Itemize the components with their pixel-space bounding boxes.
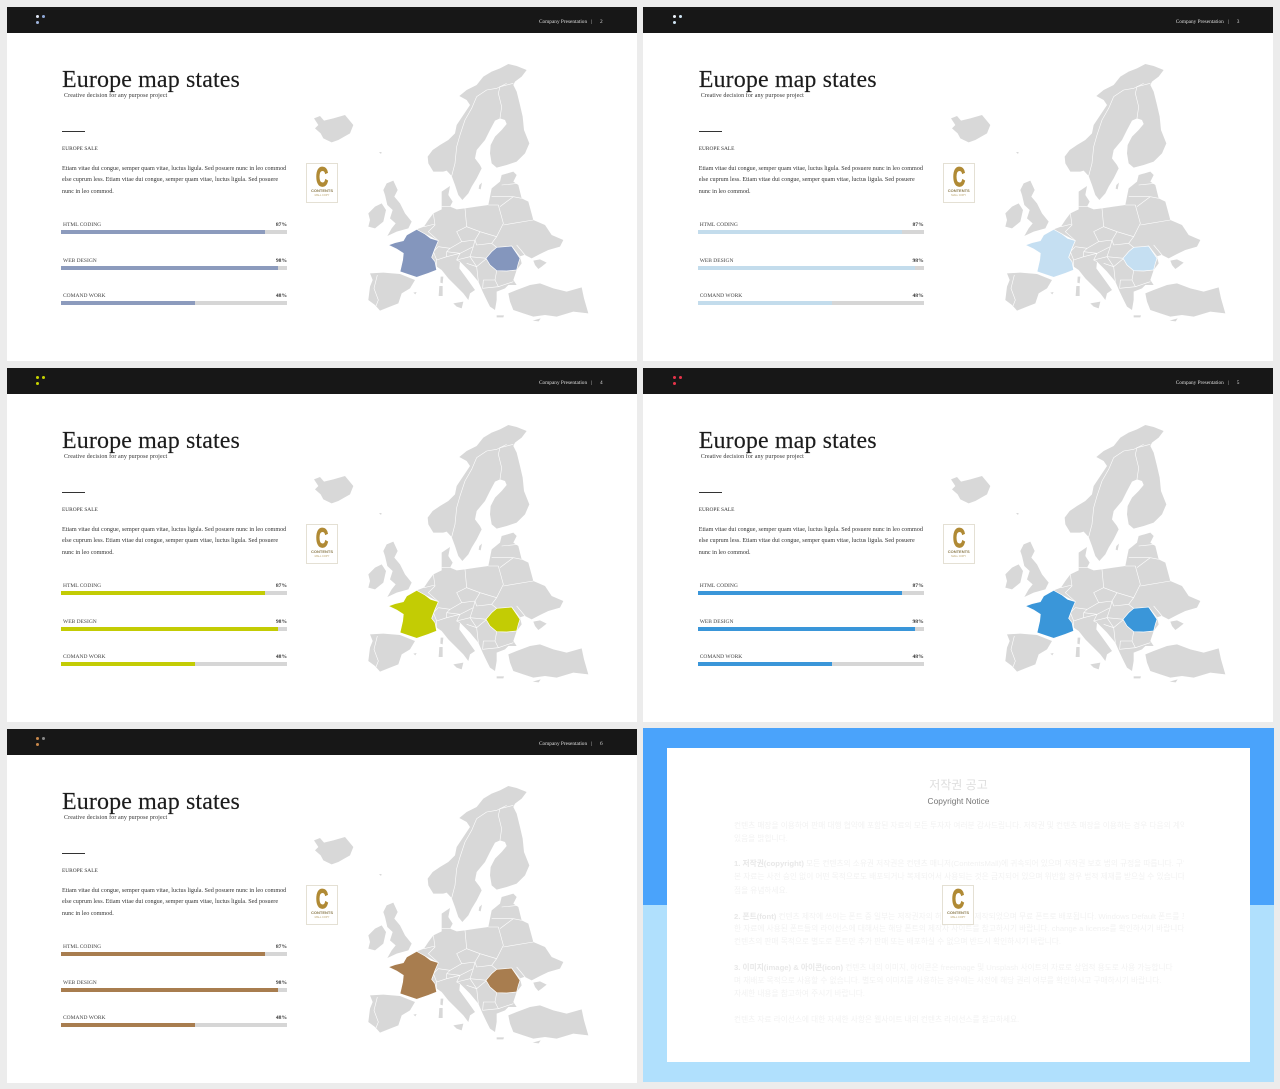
watermark logo: CONTENTS: [948, 188, 970, 193]
body text: [698, 166, 923, 195]
skill bar: comand work: COMAND WORK: [63, 1014, 106, 1020]
watermark logo: MALL COPY: [315, 555, 329, 558]
skill bar: html coding: 87%: [276, 582, 287, 588]
title: Europe map states: [62, 789, 240, 815]
skill bar: web design: 98%: [276, 618, 287, 624]
copyright text: 컨텐츠 자료 라이선스에 대한 자세한 사항은 웹사이트 내의 컨텐츠 라이선스를 참고하세요.: [734, 1015, 1019, 1024]
skill bar: comand work: [698, 654, 924, 666]
watermark logo: [306, 885, 338, 925]
skill bar: web design: WEB DESIGN: [63, 980, 97, 986]
skill bar: comand work: 48%: [276, 1014, 287, 1020]
skill bar: comand work: 48%: [276, 654, 287, 660]
europe map: [314, 425, 588, 682]
skill bar: html coding: HTML CODING: [63, 222, 101, 228]
title: Europe map states: [699, 428, 877, 454]
slide 6: copyright notice: [643, 728, 1274, 1082]
skill bar: comand work: 48%: [912, 654, 924, 660]
header bar: |: [591, 740, 592, 746]
skill bar: web design: [698, 258, 924, 270]
copyright panel: [667, 748, 1250, 1062]
skill bar: html coding: HTML CODING: [63, 582, 101, 588]
title: Europe map states: [699, 67, 877, 93]
watermark logo: CONTENTS: [311, 188, 333, 193]
skill bar: web design: 98%: [912, 618, 924, 624]
skill bar: web design: [61, 618, 287, 631]
watermark logo: MALL COPY: [951, 916, 965, 919]
skill bar: html coding: HTML CODING: [700, 582, 738, 588]
header bar: 4: [600, 380, 603, 386]
header bar: |: [591, 380, 592, 386]
body text: nunc in leo commod.: [62, 189, 114, 195]
body text: Etiam vitae dui congue, semper quam vitae, luctus ligula. Sed posuere nunc in leo commod: [62, 526, 286, 532]
body text: [62, 166, 286, 195]
watermark logo: C: [316, 523, 328, 553]
watermark logo: MALL COPY: [315, 194, 329, 197]
watermark logo: [306, 163, 338, 203]
watermark logo: CONTENTS: [947, 910, 969, 915]
skill bar: web design: 98%: [276, 258, 287, 264]
body text: nunc in leo commod.: [62, 911, 114, 917]
europe map: [314, 64, 588, 322]
slide 2: pale-blue map: [643, 7, 1273, 361]
body text: else cuprum less. Etiam vitae dui congue, semper quam vitae, luctus ligula. Sed posuere: [62, 177, 278, 183]
watermark logo: MALL COPY: [951, 194, 966, 197]
skill bar: web design: 98%: [912, 258, 924, 264]
body text: else cuprum less. Etiam vitae dui congue, semper quam vitae, luctus ligula. Sed posuere: [699, 177, 915, 183]
header bar: [7, 368, 637, 394]
skill bar: html coding: HTML CODING: [63, 944, 101, 950]
skill bar: web design: [61, 980, 287, 992]
header bar: |: [591, 18, 592, 24]
copyright title: 저작권 공고: [929, 778, 988, 792]
body text: [698, 526, 923, 556]
header bar: |: [1228, 18, 1229, 24]
body text: Etiam vitae dui congue, semper quam vitae, luctus ligula. Sed posuere nunc in leo commod: [699, 166, 923, 172]
copyright text: 자세한 내용을 참고하여 주시기 바랍니다.: [734, 989, 865, 998]
watermark logo: [942, 885, 974, 925]
header bar: Company Presentation: [1176, 380, 1224, 386]
copyright text: 2. 폰트(font) 컨텐츠 제작에 쓰이는 폰트 중 일부는 저작권자의 허가를 받아 제작되었으며 무료 폰트로 배포됩니다. Windows Default 폰트를 포함: [734, 912, 1184, 921]
slide 3: lime map: [7, 368, 637, 722]
skill bar: html coding: [698, 222, 924, 234]
body text: [62, 526, 286, 556]
copyright subtitle: Copyright Notice: [928, 796, 989, 806]
watermark logo: CONTENTS: [311, 910, 333, 915]
header bar: Company Presentation: [1176, 18, 1224, 24]
skill bar: html coding: HTML CODING: [700, 222, 738, 228]
copyright text: 점을 유념하세요.: [734, 886, 788, 895]
copyright text: 본 자료는 사전 승인 없이 어떤 목적으로도 배포되거나 복제되어서 사용되는 것은 금지되어 있으며 위반할 경우 법적 제재를 받으실 수 있습니다.: [734, 872, 1184, 881]
watermark logo: [306, 524, 338, 564]
copyright text: 며 재배포 목적으로 사용할 수 없습니다. 별도의 이미지를 사용하는 경우에는 사전에 해당 권리 여부를 확인하시고 구매하시기 바랍니다.: [734, 976, 1161, 985]
skill bar: comand work: COMAND WORK: [700, 654, 742, 660]
subtitle: Creative decision for any purpose project: [64, 454, 167, 460]
subtitle: Creative decision for any purpose project: [701, 454, 804, 460]
copyright text: 컨텐츠의 판매 목적으로 별도로 폰트만 추가 판매 또는 배포하실 수 없으며 반드시 확인하시기 바랍니다.: [734, 937, 1061, 946]
skill bar: comand work: 48%: [276, 292, 287, 298]
body text: else cuprum less. Etiam vitae dui congue, semper quam vitae, luctus ligula. Sed posuere: [62, 538, 278, 544]
skill bar: html coding: 87%: [276, 222, 287, 228]
skill bar: comand work: COMAND WORK: [63, 654, 106, 660]
section heading: EUROPE SALE: [62, 868, 98, 874]
header bar: |: [1228, 380, 1229, 386]
copyright text: 있음을 밝힙니다.: [734, 834, 788, 843]
watermark logo: C: [316, 884, 328, 914]
skill bar: html coding: [61, 222, 287, 234]
skill bar: comand work: [61, 1014, 287, 1027]
body text: [62, 888, 286, 917]
slide 4: blue map: [643, 368, 1273, 722]
skill bar: web design: [61, 258, 287, 270]
skill bar: web design: WEB DESIGN: [63, 258, 97, 264]
watermark logo: CONTENTS: [948, 549, 970, 554]
watermark logo: MALL COPY: [951, 555, 966, 558]
section heading: EUROPE SALE: [62, 146, 98, 152]
watermark logo: C: [953, 523, 965, 553]
skill bar: web design: WEB DESIGN: [700, 618, 733, 624]
europe map: [314, 786, 588, 1044]
section heading: EUROPE SALE: [699, 507, 734, 513]
title: Europe map states: [62, 428, 240, 454]
header bar: [7, 7, 637, 33]
skill bar: web design: WEB DESIGN: [700, 258, 733, 264]
body text: nunc in leo commod.: [699, 550, 751, 556]
header bar: [7, 729, 637, 755]
copyright text: 3. 이미지(image) & 아이콘(icon) 컨텐츠 내의 이미지, 아이콘은 freeimage 및 Unsplash 사이트의 자료로 상업적 용도로 사용 가능합니다: [734, 963, 1173, 972]
copyright text: 1. 저작권(copyright) 모든 컨텐츠의 소유권 저작권은 컨텐츠 매니저(ContentsMall)에 귀속되어 있으며 저작권 보호 법의 규정을 따릅니다. 구입한: [734, 859, 1184, 868]
subtitle: Creative decision for any purpose project: [64, 93, 167, 99]
skill bar: comand work: [698, 292, 924, 305]
skill bar: web design: WEB DESIGN: [63, 618, 97, 624]
header bar: 3: [1237, 18, 1239, 24]
header bar: 2: [600, 18, 603, 24]
copyright text: 한 자료에 사용된 폰트들의 라이선스에 대해서는 해당 폰트의 제작자 사이트를 참고하시기 바랍니다. change a license를 확인하시기 바랍니다.: [734, 924, 1184, 933]
subtitle: Creative decision for any purpose project: [64, 815, 167, 821]
section heading: EUROPE SALE: [699, 146, 734, 152]
skill bar: html coding: [61, 944, 287, 956]
body text: else cuprum less. Etiam vitae dui congue, semper quam vitae, luctus ligula. Sed posuere: [62, 899, 278, 905]
header bar: Company Presentation: [539, 380, 587, 386]
header bar: Company Presentation: [539, 18, 587, 24]
watermark logo: MALL COPY: [315, 916, 329, 919]
header bar: [643, 7, 1273, 33]
skill bar: comand work: 48%: [912, 292, 924, 298]
title: Europe map states: [62, 67, 240, 93]
slide 1: navy-blue map: [7, 7, 637, 361]
body text: Etiam vitae dui congue, semper quam vitae, luctus ligula. Sed posuere nunc in leo commod: [699, 526, 923, 532]
watermark logo: CONTENTS: [311, 549, 333, 554]
skill bar: html coding: 87%: [276, 944, 287, 950]
skill bar: web design: [698, 618, 924, 631]
header bar: [643, 368, 1273, 394]
skill bar: comand work: COMAND WORK: [63, 292, 106, 298]
body text: nunc in leo commod.: [699, 189, 751, 195]
header bar: Company Presentation: [539, 740, 587, 746]
watermark logo: C: [316, 162, 328, 192]
skill bar: web design: 98%: [276, 980, 287, 986]
body text: Etiam vitae dui congue, semper quam vitae, luctus ligula. Sed posuere nunc in leo commod: [62, 888, 286, 894]
slide 5: brown map: [7, 729, 637, 1083]
watermark logo: [943, 524, 975, 564]
subtitle: Creative decision for any purpose project: [701, 93, 804, 99]
skill bar: comand work: [61, 654, 287, 666]
skill bar: html coding: 87%: [912, 582, 924, 588]
europe map: [951, 64, 1226, 322]
skill bar: html coding: 87%: [912, 222, 924, 228]
watermark logo: [943, 163, 975, 203]
europe map: [951, 425, 1226, 682]
body text: nunc in leo commod.: [62, 550, 114, 556]
skill bar: comand work: COMAND WORK: [700, 292, 742, 298]
body text: else cuprum less. Etiam vitae dui congue, semper quam vitae, luctus ligula. Sed posuere: [699, 538, 915, 544]
skill bar: html coding: [61, 582, 287, 595]
watermark logo: C: [953, 162, 965, 192]
header bar: 5: [1237, 380, 1239, 386]
skill bar: comand work: [61, 292, 287, 305]
skill bar: html coding: [698, 582, 924, 595]
header bar: 6: [600, 740, 603, 746]
section heading: EUROPE SALE: [62, 507, 98, 513]
body text: Etiam vitae dui congue, semper quam vitae, luctus ligula. Sed posuere nunc in leo commod: [62, 166, 286, 172]
